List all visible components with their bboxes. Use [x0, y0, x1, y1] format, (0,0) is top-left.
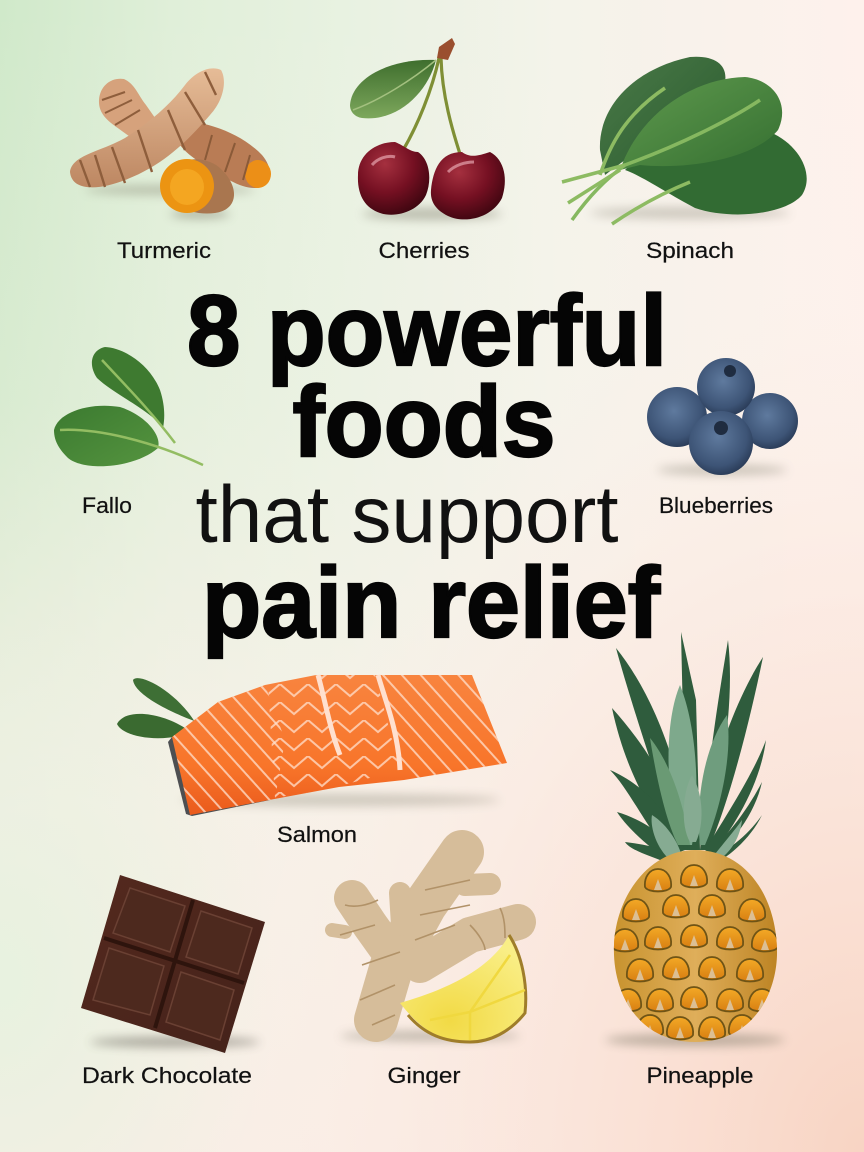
icon: ginger with pineapple wedge	[332, 852, 526, 1042]
icon: pineapple	[605, 632, 785, 1046]
icon: cherries	[350, 38, 505, 220]
icon: salmon	[117, 675, 507, 816]
title: 8 powerful	[187, 275, 667, 387]
label: Salmon: Salmon	[277, 822, 357, 847]
icon: spinach	[562, 57, 807, 224]
icon: turmeric	[70, 68, 271, 218]
icon: blueberries	[647, 358, 798, 475]
title: foods	[292, 366, 556, 478]
label: Spinach: Spinach	[646, 238, 734, 263]
title: that support	[196, 470, 618, 560]
label: Fallo: Fallo	[82, 493, 132, 518]
label: Blueberries: Blueberries	[659, 493, 773, 518]
icon: dark chocolate	[81, 875, 265, 1053]
title	[187, 275, 667, 659]
label: Pineapple: Pineapple	[646, 1063, 754, 1088]
label: Ginger: Ginger	[388, 1063, 460, 1088]
label: Dark Chocolate: Dark Chocolate	[82, 1063, 252, 1088]
title: pain relief	[202, 547, 661, 659]
label: Cherries: Cherries	[378, 238, 470, 263]
label: Turmeric: Turmeric	[117, 238, 211, 263]
icon: leaves	[54, 347, 203, 466]
